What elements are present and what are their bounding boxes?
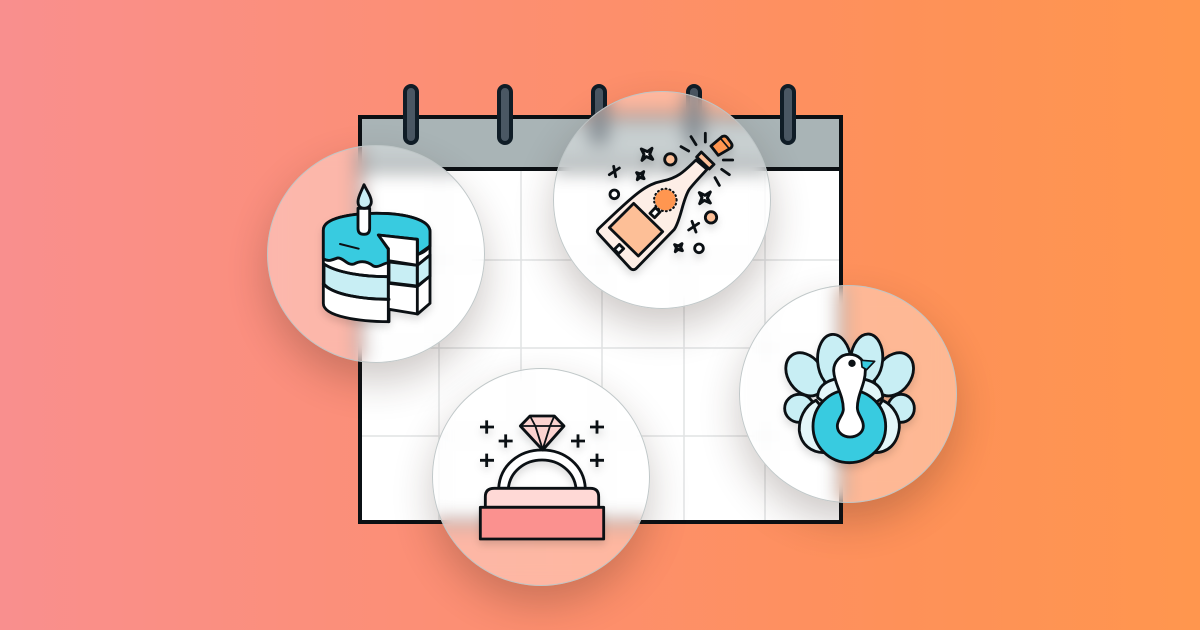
icon: turkey — [781, 332, 918, 471]
panel: turkey badge — [739, 285, 957, 503]
icon: engagement ring — [476, 414, 608, 548]
icon: champagne bottle — [594, 132, 734, 277]
panel: champagne badge — [553, 91, 771, 309]
panel: engagement ring badge — [432, 368, 650, 586]
calendar page — [360, 117, 841, 522]
calendar header — [360, 117, 841, 169]
panel: cake badge — [267, 145, 485, 363]
icon: birthday cake — [320, 183, 434, 330]
binder rings — [405, 86, 794, 143]
